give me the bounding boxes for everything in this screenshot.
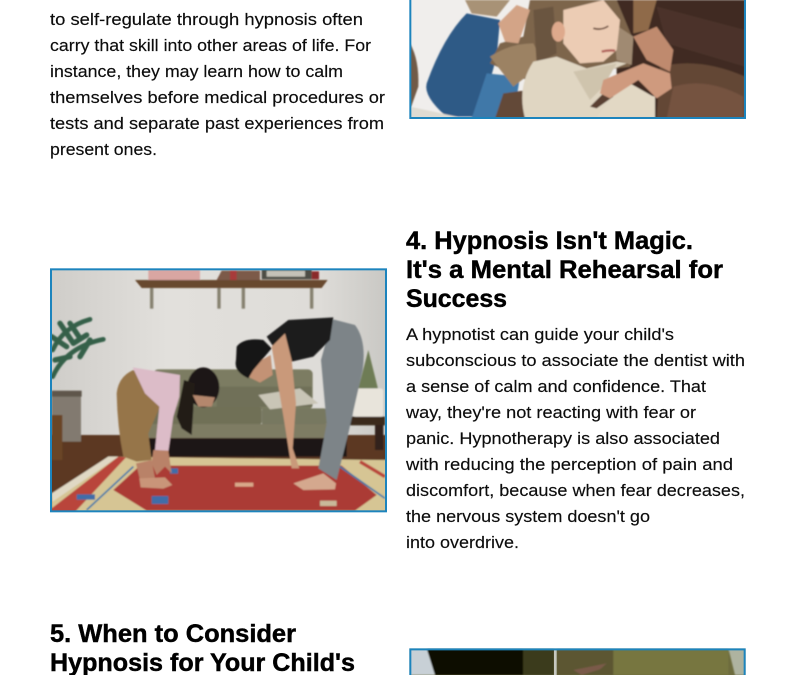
text block: section 4 paragraph (405, 325, 745, 552)
shelf (135, 280, 328, 288)
text block: section 4 paragraph: way, they're not reacting with fear or (405, 403, 696, 422)
mother (318, 319, 364, 480)
books and frames (148, 270, 200, 280)
photo: section 5 image, top edge (409, 648, 746, 675)
text block: section 4 paragraph: the nervous system doesn't go (406, 507, 650, 526)
text block: self-regulation paragraph: instance, they may learn how to calm (50, 62, 343, 81)
heading: section 4: 4. Hypnosis Isn't Magic. (406, 227, 693, 255)
text block: section 4 paragraph: subconscious to associate the dentist with (406, 351, 745, 370)
text block: section 4 paragraph: a sense of calm and confidence. That (406, 377, 706, 396)
heading: section 5: 5. When to Consider (50, 620, 296, 648)
text block: section 4 paragraph: A hypnotist can guide your child's (406, 325, 674, 344)
heading: section 5 (50, 620, 355, 675)
text block: section 4 paragraph: discomfort, because when fear decreases, (406, 481, 745, 500)
table and plant right (349, 416, 385, 426)
potted plant left (52, 319, 103, 377)
text block: self-regulation paragraph: tests and separate past experiences from (50, 114, 384, 133)
text block: section 4 paragraph: with reducing the perception of pain and (405, 455, 733, 474)
text block: self-regulation paragraph: present ones. (50, 140, 157, 159)
text block: self-regulation paragraph: to self-regulate through hypnosis often (50, 10, 363, 29)
heading: section 4: Success (406, 285, 507, 313)
photo: mother and daughter stretching on rug (50, 269, 387, 512)
child (117, 370, 160, 462)
text block: self-regulation paragraph (50, 10, 385, 159)
text block: section 4 paragraph: into overdrive. (406, 533, 519, 552)
text block: self-regulation paragraph: themselves before medical procedures or (50, 88, 385, 107)
text block: section 4 paragraph: panic. Hypnotherapy is also associated (406, 429, 720, 448)
heading: section 4 (406, 227, 723, 313)
couch (153, 369, 313, 409)
heading: section 4: It's a Mental Rehearsal for (406, 256, 723, 284)
floor (50, 435, 387, 512)
text block: self-regulation paragraph: carry that skill into other areas of life. For (50, 36, 371, 55)
photo: sleeping child on parent's lap (410, 0, 745, 118)
rug (52, 457, 387, 512)
